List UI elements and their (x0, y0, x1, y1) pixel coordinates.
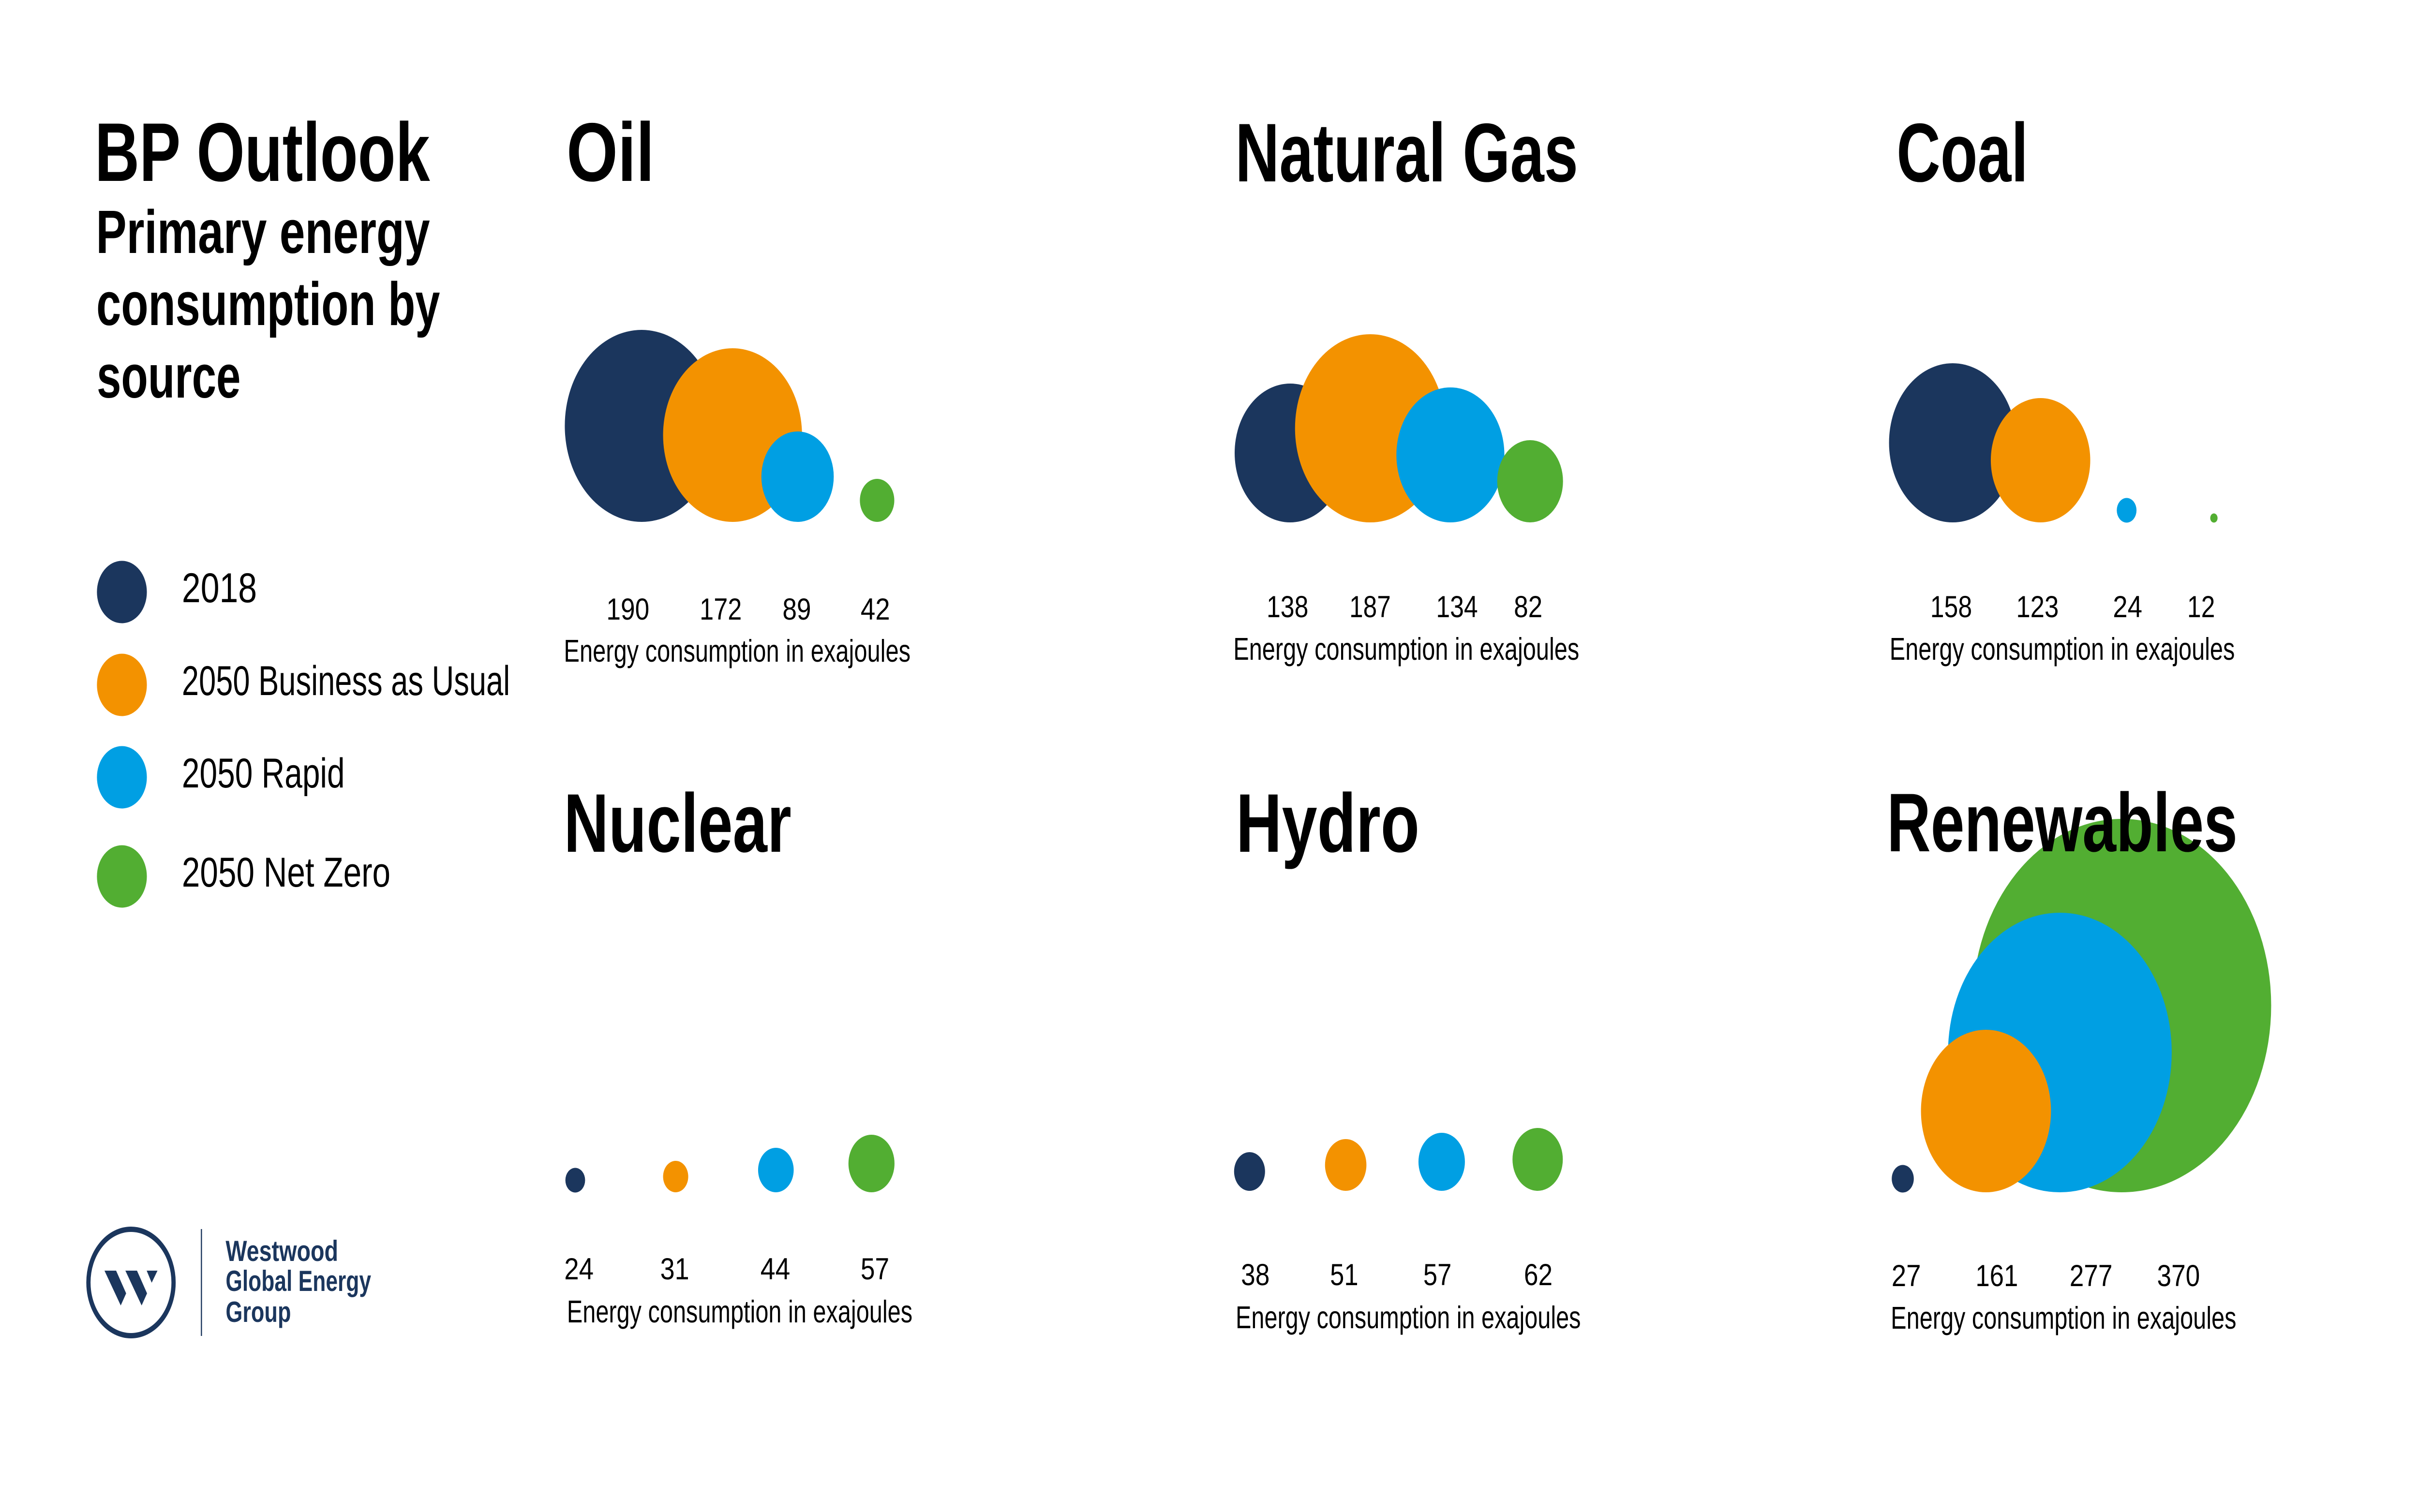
logo text: Global Energy (225, 1265, 371, 1297)
legend item: 2050 Rapid (97, 746, 345, 809)
values: renewables (1892, 1259, 2200, 1293)
values: coal: 12 (2187, 590, 2215, 624)
values: hydro (1241, 1258, 1553, 1292)
values: coal: 123 (2016, 590, 2059, 624)
values: coal: 24 (2113, 590, 2142, 624)
caption: renewables: Energy consumption in exajoules (1891, 1301, 2236, 1335)
values: oil: 172 (700, 593, 742, 626)
legend (97, 561, 510, 907)
legend item: 2050 Net Zero (97, 845, 390, 907)
legend item: 2050 Business as Usual (97, 654, 510, 716)
values: natural gas: 82 (1514, 590, 1542, 624)
values: coal (1930, 590, 2215, 624)
bubble chart: oil (565, 330, 895, 522)
title: BP Outlook (95, 106, 430, 199)
legend item: 2050 Business as Usual: 2050 Business as Usual (182, 658, 510, 704)
heading: natural gas: Natural Gas (1235, 106, 1578, 200)
panel: hydro (1234, 777, 1581, 1335)
values: nuclear: 57 (861, 1252, 889, 1286)
values: natural gas: 138 (1267, 590, 1308, 624)
caption: hydro: Energy consumption in exajoules (1236, 1301, 1581, 1335)
caption: natural gas: Energy consumption in exajoules (1233, 632, 1579, 667)
bubble chart: hydro (1234, 1128, 1563, 1191)
subtitle (96, 198, 440, 411)
title block (95, 106, 440, 411)
logo text (225, 1235, 371, 1328)
legend item: 2018 (97, 561, 257, 623)
heading: hydro: Hydro (1236, 777, 1419, 870)
values: natural gas: 134 (1436, 590, 1478, 624)
heading: nuclear: Nuclear (564, 777, 791, 870)
subtitle: consumption by (96, 270, 440, 339)
legend item: 2018: 2018 (182, 565, 257, 611)
values: renewables: 161 (1975, 1259, 2018, 1293)
caption: coal: Energy consumption in exajoules (1890, 632, 2235, 667)
subtitle: source (97, 343, 241, 411)
legend item: 2050 Net Zero: 2050 Net Zero (182, 849, 390, 896)
heading: coal: Coal (1896, 106, 2028, 200)
panel: natural gas (1233, 106, 1579, 667)
values: hydro: 51 (1330, 1258, 1359, 1292)
values: renewables: 277 (2070, 1259, 2113, 1293)
bubble chart: coal (1889, 363, 2218, 522)
values: renewables: 27 (1892, 1259, 1921, 1293)
heading: renewables: Renewables (1887, 776, 2238, 870)
values: nuclear (564, 1252, 889, 1286)
heading: oil: Oil (567, 106, 655, 199)
values: natural gas (1267, 590, 1542, 624)
values: oil (606, 593, 890, 626)
logo: Westwood Global Energy Group (89, 1229, 371, 1336)
panel: coal (1889, 106, 2235, 667)
values: hydro: 62 (1524, 1258, 1553, 1292)
values: oil: 190 (606, 593, 649, 626)
values: renewables: 370 (2157, 1259, 2200, 1293)
caption: oil: Energy consumption in exajoules (564, 634, 911, 668)
icon: W in circle (89, 1230, 174, 1336)
panel: renewables (1887, 776, 2271, 1335)
bubble chart: natural gas (1235, 334, 1563, 522)
values: hydro: 38 (1241, 1258, 1269, 1292)
subtitle: Primary energy (96, 198, 430, 267)
values: coal: 158 (1930, 590, 1972, 624)
legend item: 2050 Rapid: 2050 Rapid (182, 750, 345, 797)
values: hydro: 57 (1423, 1258, 1451, 1292)
panel: nuclear (564, 777, 912, 1329)
bubble chart: renewables (1892, 819, 2271, 1193)
caption: nuclear: Energy consumption in exajoules (567, 1295, 912, 1329)
panel: oil (564, 106, 911, 668)
values: oil: 42 (861, 593, 890, 626)
values: oil: 89 (782, 593, 811, 626)
values: nuclear: 44 (761, 1252, 790, 1286)
values: natural gas: 187 (1349, 590, 1391, 624)
values: nuclear: 31 (660, 1252, 689, 1286)
logo text: Group (225, 1296, 291, 1328)
logo text: Westwood (225, 1235, 338, 1267)
values: nuclear: 24 (564, 1252, 594, 1286)
bubble chart: nuclear (566, 1135, 895, 1193)
